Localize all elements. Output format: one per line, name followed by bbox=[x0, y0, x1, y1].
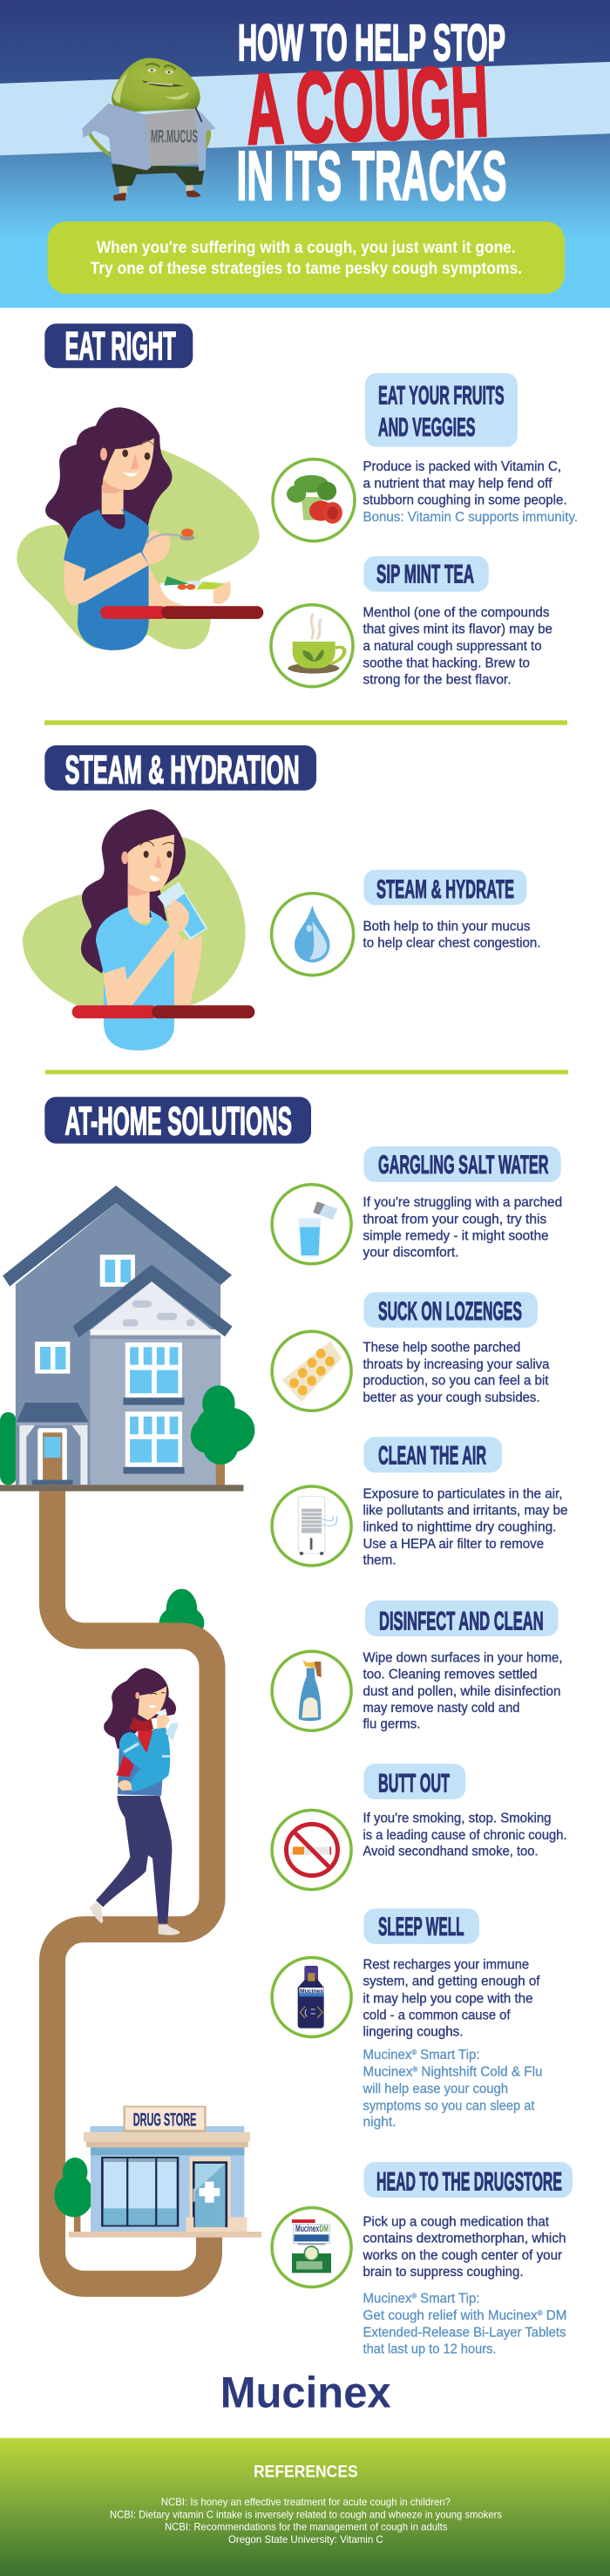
text: smart tip nightshift bbox=[363, 2048, 542, 2130]
text: lozenges: production, so you can feel a bit bbox=[363, 1374, 549, 1389]
text: clean air: like pollutants and irritants, may be bbox=[363, 1504, 568, 1519]
text: smart tip nightshift: Mucinex bbox=[363, 2064, 413, 2079]
references list: Oregon State University: Vitamin C bbox=[228, 2533, 383, 2545]
footer: references bbox=[0, 2438, 610, 2576]
illustration: drug store bbox=[54, 2106, 261, 2238]
illustration: woman eating salad bbox=[17, 407, 263, 650]
icon: broccoli and tomato bbox=[273, 459, 355, 541]
text: sleep well: system, and getting enough of bbox=[363, 1974, 540, 1989]
references list bbox=[110, 2496, 502, 2545]
logo: Mucinex: Mucinex bbox=[220, 2369, 391, 2417]
text: smart tip DM: Smart Tip: bbox=[417, 2292, 479, 2307]
tip: steam and hydrate bbox=[272, 870, 540, 975]
text: gargling bbox=[363, 1195, 562, 1261]
icon: nightshift bottle bbox=[272, 1958, 351, 2036]
text: gargling: If you're struggling with a parched bbox=[363, 1195, 562, 1210]
text: fruits and veggies: Bonus: Vitamin C supports immunity. bbox=[363, 510, 578, 525]
text: disinfect: too. Cleaning removes settled bbox=[363, 1668, 537, 1682]
illustration: woman walking and coughing bbox=[90, 1668, 180, 1935]
text: fruits and veggies: a nutrient that may help fend off bbox=[363, 476, 552, 491]
text: sleep well: cold - a common cause of bbox=[363, 2008, 511, 2023]
references list: NCBI: Is honey an effective treatment for acute cough in children? bbox=[161, 2496, 451, 2508]
intro callout bbox=[47, 221, 565, 294]
illustration: woman drinking water bbox=[23, 809, 254, 1050]
tip: clean the air: CLEAN THE AIR bbox=[378, 1441, 486, 1470]
text: disinfect: flu germs. bbox=[363, 1717, 420, 1732]
text: fruits and veggies: Produce is packed with Vitamin C, bbox=[363, 459, 561, 474]
intro callout: Try one of these strategies to tame pesky cough symptoms. bbox=[91, 260, 522, 278]
text: fruits and veggies: stubborn coughing in some people. bbox=[363, 493, 566, 508]
text: head to drugstore: brain to suppress coughing. bbox=[363, 2265, 523, 2280]
diagonal light band bbox=[0, 62, 610, 155]
mascot: Mr. Mucus: MR.MUCUS bbox=[151, 126, 198, 146]
references heading: REFERENCES bbox=[254, 2464, 358, 2482]
tip: gargling salt water bbox=[272, 1146, 562, 1264]
text: lozenges: These help soothe parched bbox=[363, 1341, 520, 1356]
text: disinfect: Wipe down surfaces in your home, bbox=[363, 1651, 563, 1666]
tip: eat your fruits and veggies: AND VEGGIES bbox=[378, 413, 476, 442]
text: clean air: linked to nighttime dry coughing. bbox=[363, 1520, 556, 1535]
illustration: house bbox=[0, 1186, 254, 1492]
text: smart tip DM: Get cough relief with Mucinex bbox=[363, 2308, 540, 2323]
text: gargling: throat from your cough, try this bbox=[363, 1212, 546, 1227]
text: smart tip DM bbox=[363, 2292, 566, 2356]
text: smart tip nightshift: symptoms so you can sleep at bbox=[363, 2098, 535, 2113]
text: mint tea: that gives mint its flavor) may be bbox=[363, 622, 552, 637]
text: head to drugstore: contains dextromethorphan, which bbox=[363, 2232, 566, 2246]
text: disinfect: may remove nasty cold and bbox=[363, 1701, 519, 1716]
text: smart tip nightshift: ® bbox=[412, 2065, 417, 2073]
icon: water drop bbox=[272, 894, 354, 975]
icon: lozenge blister pack bbox=[272, 1331, 351, 1410]
text: butt out: is a leading cause of chronic cough. bbox=[363, 1828, 566, 1843]
text: butt out bbox=[363, 1811, 566, 1859]
tip: sip mint tea: SIP MINT TEA bbox=[376, 560, 474, 588]
text: steam and hydrate bbox=[363, 919, 540, 951]
icon: tea cup bbox=[271, 605, 353, 687]
text: smart tip DM: that last up to 12 hours. bbox=[363, 2342, 497, 2356]
text: smart tip nightshift: night. bbox=[363, 2115, 396, 2130]
text: head to drugstore: Pick up a cough medication that bbox=[363, 2214, 550, 2229]
text: sleep well: lingering coughs. bbox=[363, 2025, 464, 2040]
section heading: at-home solutions bbox=[44, 1097, 311, 1144]
tip: disinfect and clean bbox=[272, 1601, 563, 1732]
tip: clean the air bbox=[272, 1437, 568, 1567]
tip: eat your fruits and veggies: EAT YOUR FRUITS bbox=[378, 381, 505, 410]
title bbox=[237, 15, 507, 214]
small tree behind path bbox=[159, 1589, 204, 1641]
icon: spray bottle bbox=[272, 1651, 351, 1730]
text: lozenges: throats by increasing your saliva bbox=[363, 1357, 550, 1372]
text: mint tea bbox=[363, 605, 552, 687]
text: smart tip DM: Mucinex bbox=[363, 2292, 413, 2307]
text: gargling: simple remedy - it might soothe bbox=[363, 1229, 549, 1244]
text: sleep well: Rest recharges your immune bbox=[363, 1957, 529, 1972]
section heading: eat right bbox=[44, 323, 193, 369]
text: smart tip nightshift: Mucinex bbox=[363, 2048, 413, 2063]
text: gargling: your discomfort. bbox=[363, 1246, 458, 1261]
mascot: Mr. Mucus bbox=[82, 58, 215, 201]
text: mint tea: strong for the best flavor. bbox=[363, 672, 511, 687]
section heading: at-home solutions: AT-HOME SOLUTIONS bbox=[64, 1099, 292, 1144]
icon: nightshift bottle: Mucinex bbox=[300, 1988, 323, 1995]
icon: Mucinex DM box bbox=[272, 2207, 351, 2287]
tip: sip mint tea bbox=[271, 556, 552, 687]
text: clean air bbox=[363, 1486, 568, 1567]
tip: butt out bbox=[272, 1764, 566, 1890]
text: mint tea: soothe that hacking. Brew to bbox=[363, 656, 530, 670]
icon: Mucinex DM box: MucinexDM bbox=[295, 2224, 329, 2234]
tip: sleep well bbox=[272, 1908, 542, 2130]
text: sleep well: it may help you cope with the bbox=[363, 1991, 533, 2006]
text: smart tip nightshift: will help ease your cough bbox=[363, 2082, 508, 2097]
text: clean air: Exposure to particulates in the air, bbox=[363, 1486, 563, 1501]
section heading: steam and hydration bbox=[44, 745, 316, 792]
tip: suck on lozenges bbox=[272, 1292, 550, 1410]
text: clean air: them. bbox=[363, 1553, 396, 1567]
tip: eat your fruits and veggies bbox=[273, 373, 578, 541]
tip: head to the drugstore bbox=[272, 2162, 573, 2356]
text: butt out: If you're smoking, stop. Smoking bbox=[363, 1811, 551, 1826]
winding path bbox=[52, 1482, 213, 2284]
text: smart tip DM: ® bbox=[538, 2309, 543, 2317]
references list: NCBI: Dietary vitamin C intake is inversely related to cough and wheeze in young smokers bbox=[110, 2508, 502, 2520]
text: mint tea: Menthol (one of the compounds bbox=[363, 605, 550, 620]
text: smart tip DM: Extended-Release Bi-Layer Tablets bbox=[363, 2325, 566, 2340]
text: disinfect bbox=[363, 1651, 563, 1732]
text: butt out: Avoid secondhand smoke, too. bbox=[363, 1844, 539, 1859]
tip: butt out: BUTT OUT bbox=[378, 1769, 450, 1798]
text: lozenges: better as your cough subsides. bbox=[363, 1390, 540, 1405]
text: clean air: Use a HEPA air filter to remove bbox=[363, 1537, 544, 1552]
text: smart tip nightshift: ® bbox=[411, 2049, 417, 2056]
text: lozenges bbox=[363, 1341, 550, 1405]
tip: sleep well: SLEEP WELL bbox=[378, 1913, 464, 1941]
text: smart tip DM: DM bbox=[543, 2308, 566, 2323]
icon: air purifier bbox=[272, 1486, 351, 1566]
drug store sign: DRUG STORE bbox=[133, 2110, 196, 2130]
text: fruits and veggies bbox=[363, 459, 578, 525]
text: smart tip nightshift: Nightshift Cold & Flu bbox=[417, 2064, 542, 2079]
icon: salt and water glass bbox=[272, 1185, 351, 1264]
text: mint tea: a natural cough suppressant to bbox=[363, 639, 542, 654]
intro callout: When you're suffering with a cough, you just want it gone. bbox=[97, 239, 516, 257]
text: head to drugstore bbox=[363, 2214, 566, 2280]
text: sleep well bbox=[363, 1957, 540, 2040]
icon: no smoking bbox=[272, 1810, 351, 1890]
references list: NCBI: Recommendations for the management of cough in adults bbox=[165, 2521, 447, 2533]
text: steam and hydrate: Both help to thin your mucus bbox=[363, 919, 531, 934]
text: steam and hydrate: to help clear chest congestion. bbox=[363, 936, 540, 951]
text: smart tip nightshift: Smart Tip: bbox=[417, 2048, 479, 2063]
text: smart tip DM: ® bbox=[411, 2293, 417, 2301]
text: disinfect: dust and pollen, while disinfection bbox=[363, 1684, 561, 1699]
header banner bbox=[0, 0, 610, 308]
text: head to drugstore: works on the cough center of your bbox=[363, 2248, 562, 2263]
section heading: eat right: EAT RIGHT bbox=[64, 324, 176, 369]
section heading: steam and hydration: STEAM & HYDRATION bbox=[64, 747, 300, 792]
